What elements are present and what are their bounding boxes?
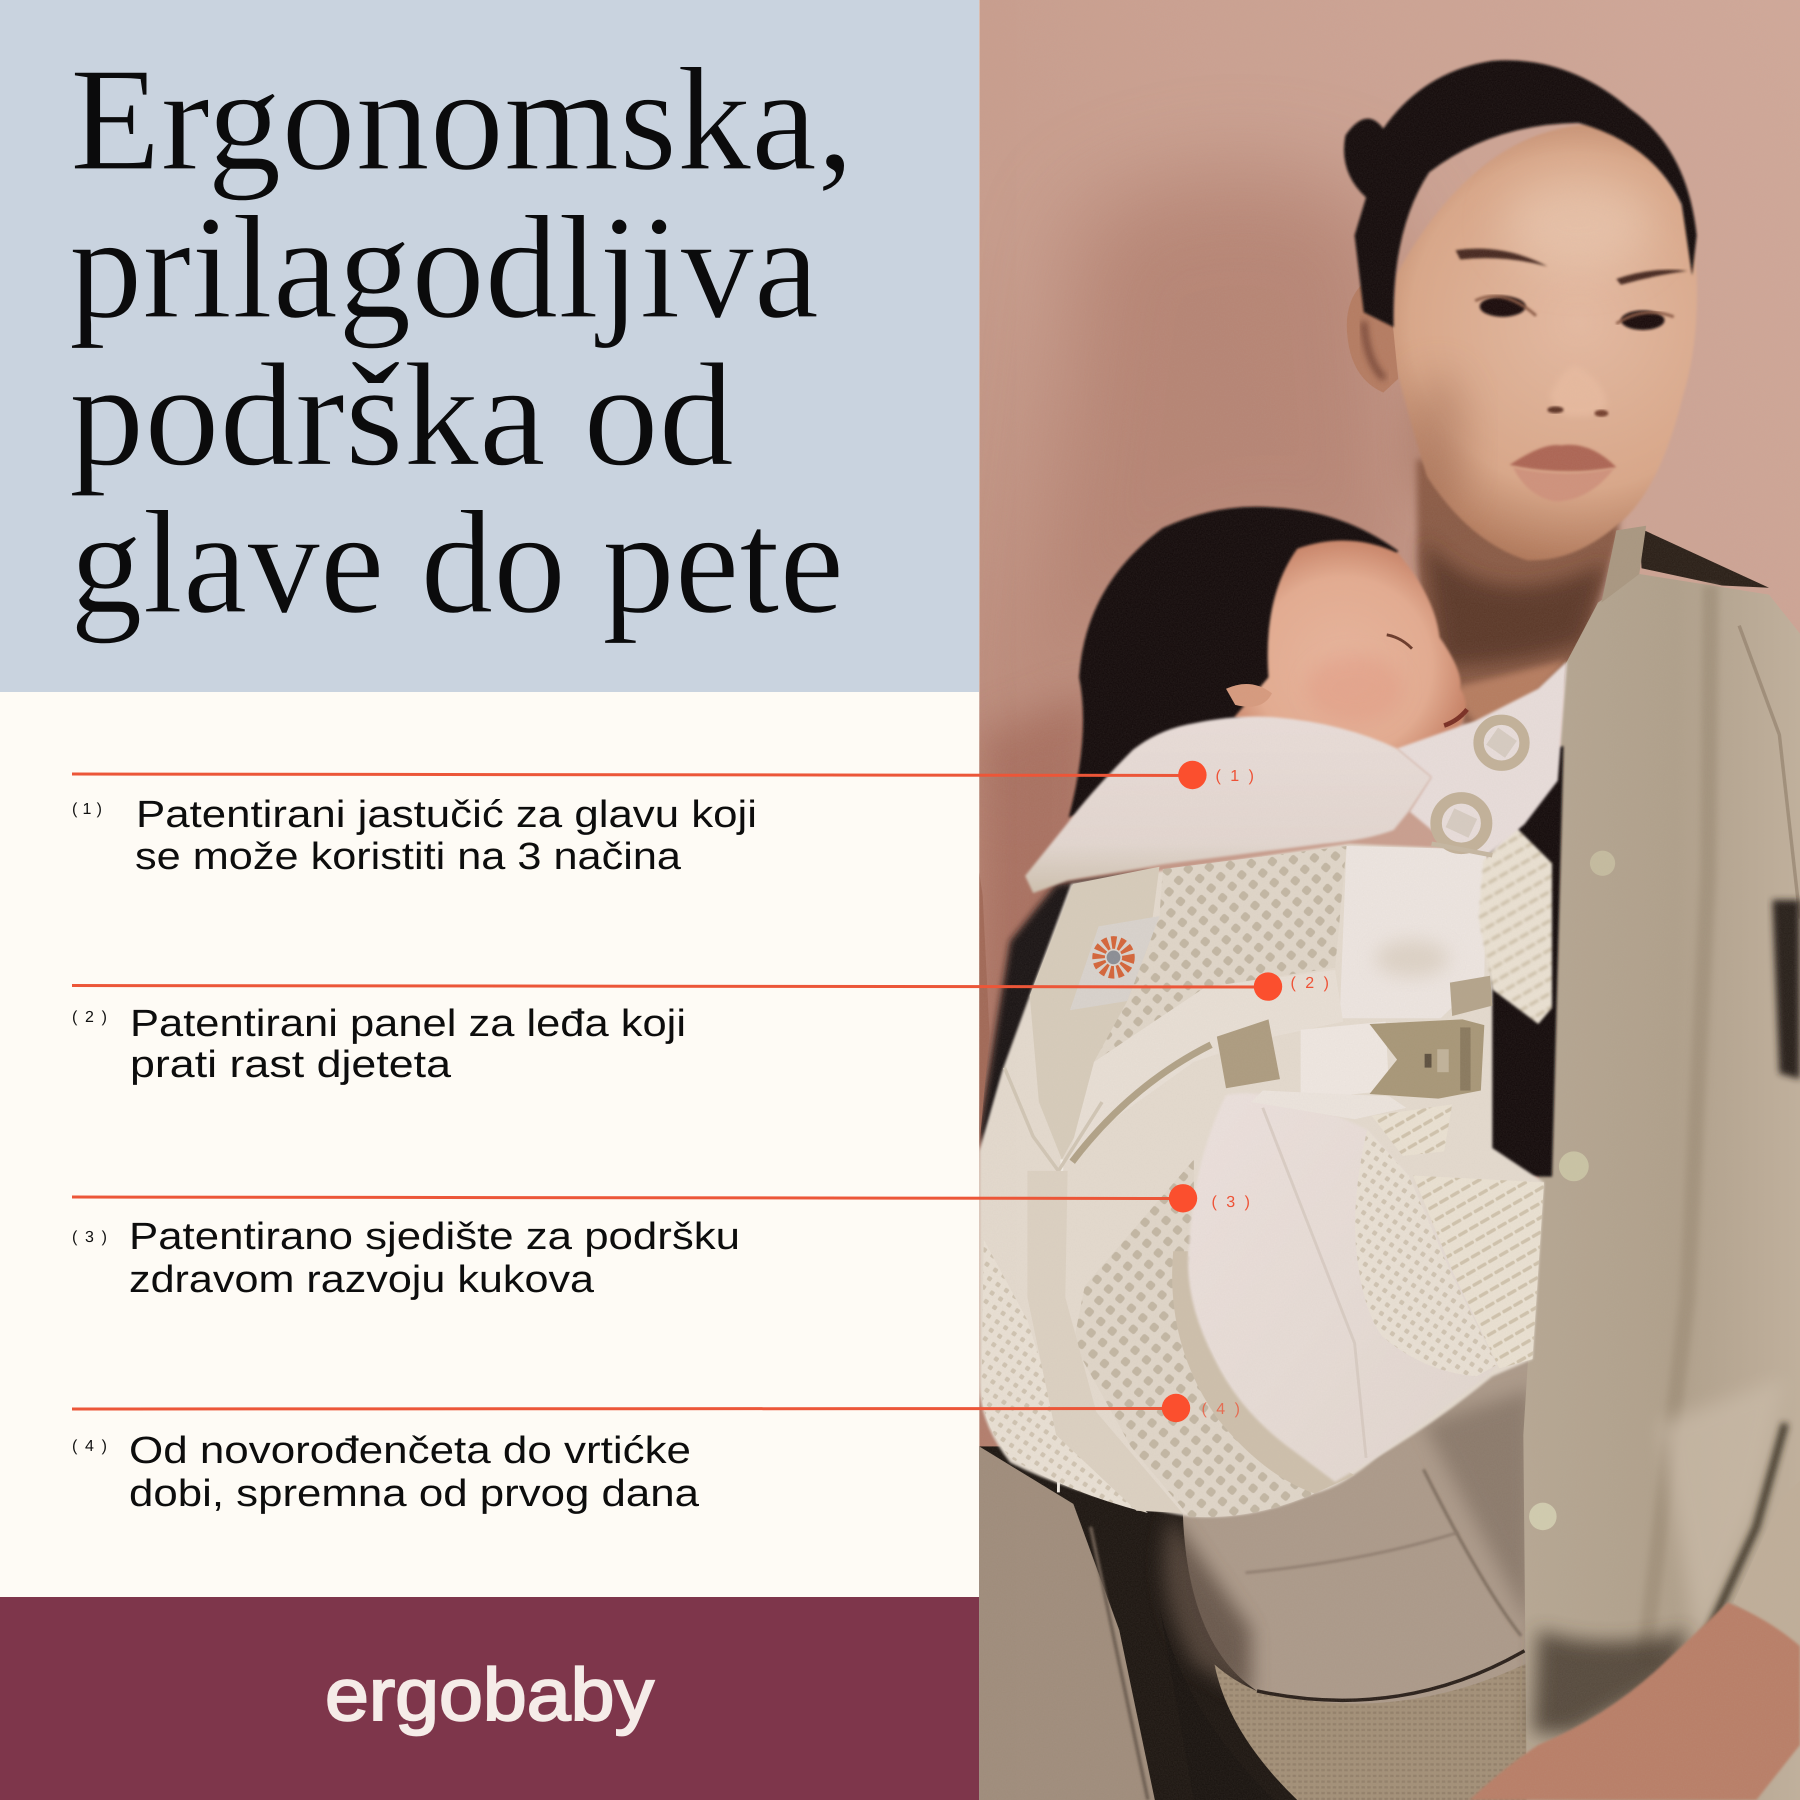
dark shadow behind carrier xyxy=(979,872,1148,1194)
knit shoulder xyxy=(1479,824,1552,1024)
neck and chest xyxy=(1417,459,1619,752)
side strap xyxy=(1030,867,1159,1159)
callout 3 line and marker: ( 3 ) xyxy=(1212,1194,1252,1211)
mother's lower body and coat flap xyxy=(979,1355,1553,1800)
chest panel xyxy=(1340,846,1487,1018)
feature 3 text: Patentirano sjedište za podršku xyxy=(129,1216,740,1258)
feature 3 text xyxy=(72,1216,740,1301)
feature 2 text xyxy=(72,1003,686,1086)
waist zip line xyxy=(1072,1045,1211,1162)
feature 1 text: Patentirani jastučić za glavu koji xyxy=(136,794,757,836)
callout 1 line and marker xyxy=(72,761,1256,789)
callout 2 line and marker xyxy=(72,972,1331,1001)
feature 4 text: dobi, spremna od prvog dana xyxy=(129,1473,700,1515)
label tag with sun logo xyxy=(1070,916,1159,1010)
baby ear xyxy=(1226,684,1272,707)
wall background xyxy=(979,0,1800,1800)
baby carrier xyxy=(979,661,1567,1517)
waist band xyxy=(1068,970,1343,1162)
shoulder strap xyxy=(1397,661,1567,855)
strap snap buttons xyxy=(1432,720,1524,855)
feature 2 text: (2) xyxy=(72,1009,107,1026)
photo: mother with baby in carrier xyxy=(979,0,1800,1800)
feature 4 text xyxy=(72,1430,700,1515)
callout 2 line and marker: ( 2 ) xyxy=(1291,975,1331,992)
leg pad pouch xyxy=(1188,1093,1497,1482)
buckle xyxy=(1370,976,1492,1099)
mother's nose xyxy=(1556,394,1602,412)
coat collar xyxy=(1639,528,1769,588)
feature 2 text: prati rast djeteta xyxy=(130,1044,452,1086)
mother's eyes and brows xyxy=(1456,249,1547,266)
callout 4 line and marker: ( 4 ) xyxy=(1202,1401,1242,1418)
belt clip xyxy=(1217,1019,1280,1088)
right knit leg xyxy=(1413,1176,1544,1368)
title: podrška od xyxy=(69,334,734,498)
panel: title background xyxy=(0,0,979,692)
title: glave do pete xyxy=(70,481,844,645)
coat buttons xyxy=(1590,851,1615,876)
waist belt xyxy=(1301,1022,1389,1100)
coat placket stitching xyxy=(1644,585,1710,1665)
callout 3 line and marker xyxy=(72,1184,1252,1213)
title: prilagodljiva xyxy=(69,186,819,350)
baby mouth xyxy=(1444,709,1467,726)
mother's hair xyxy=(1344,60,1697,327)
title: Ergonomska, xyxy=(70,38,854,202)
mother's face xyxy=(1344,60,1697,560)
vertical seat strap xyxy=(1027,1171,1182,1513)
left seam xyxy=(1058,1159,1062,1492)
photo grain xyxy=(979,0,1800,1800)
mother's hand xyxy=(1469,1603,1800,1800)
mother's lips xyxy=(1510,445,1616,471)
feature 2 text: Patentirani panel za leđa koji xyxy=(130,1003,686,1045)
feature 4 text: Od novorođenčeta do vrtićke xyxy=(129,1430,691,1472)
pouch mesh pocket xyxy=(1355,1130,1497,1376)
upper mesh panel xyxy=(1094,846,1347,1062)
feature 3 text: zdravom razvoju kukova xyxy=(129,1259,595,1301)
brand logo: ergobaby xyxy=(325,1653,654,1736)
feature 1 text: (1) xyxy=(72,801,102,818)
feature 4 text: (4) xyxy=(72,1438,107,1455)
title xyxy=(69,38,854,645)
mother's coat xyxy=(1523,526,1800,1800)
panel: feature list background xyxy=(0,692,979,1597)
baby head xyxy=(1069,507,1467,817)
lower mesh panel xyxy=(1073,1159,1314,1517)
callout 4 line and marker xyxy=(72,1394,1242,1422)
mother's ear xyxy=(1347,285,1398,393)
seat outer band xyxy=(1172,1251,1355,1493)
baby closed eye xyxy=(1387,635,1412,649)
feature 3 text: (3) xyxy=(72,1229,107,1246)
callout 1 line and marker: ( 1 ) xyxy=(1216,768,1256,785)
head support pad xyxy=(1025,717,1432,893)
feature 1 text xyxy=(72,794,757,878)
panel: brand footer xyxy=(0,1597,979,1800)
carrier main body xyxy=(979,844,1544,1517)
feature 1 text: se može koristiti na 3 načina xyxy=(135,836,682,878)
